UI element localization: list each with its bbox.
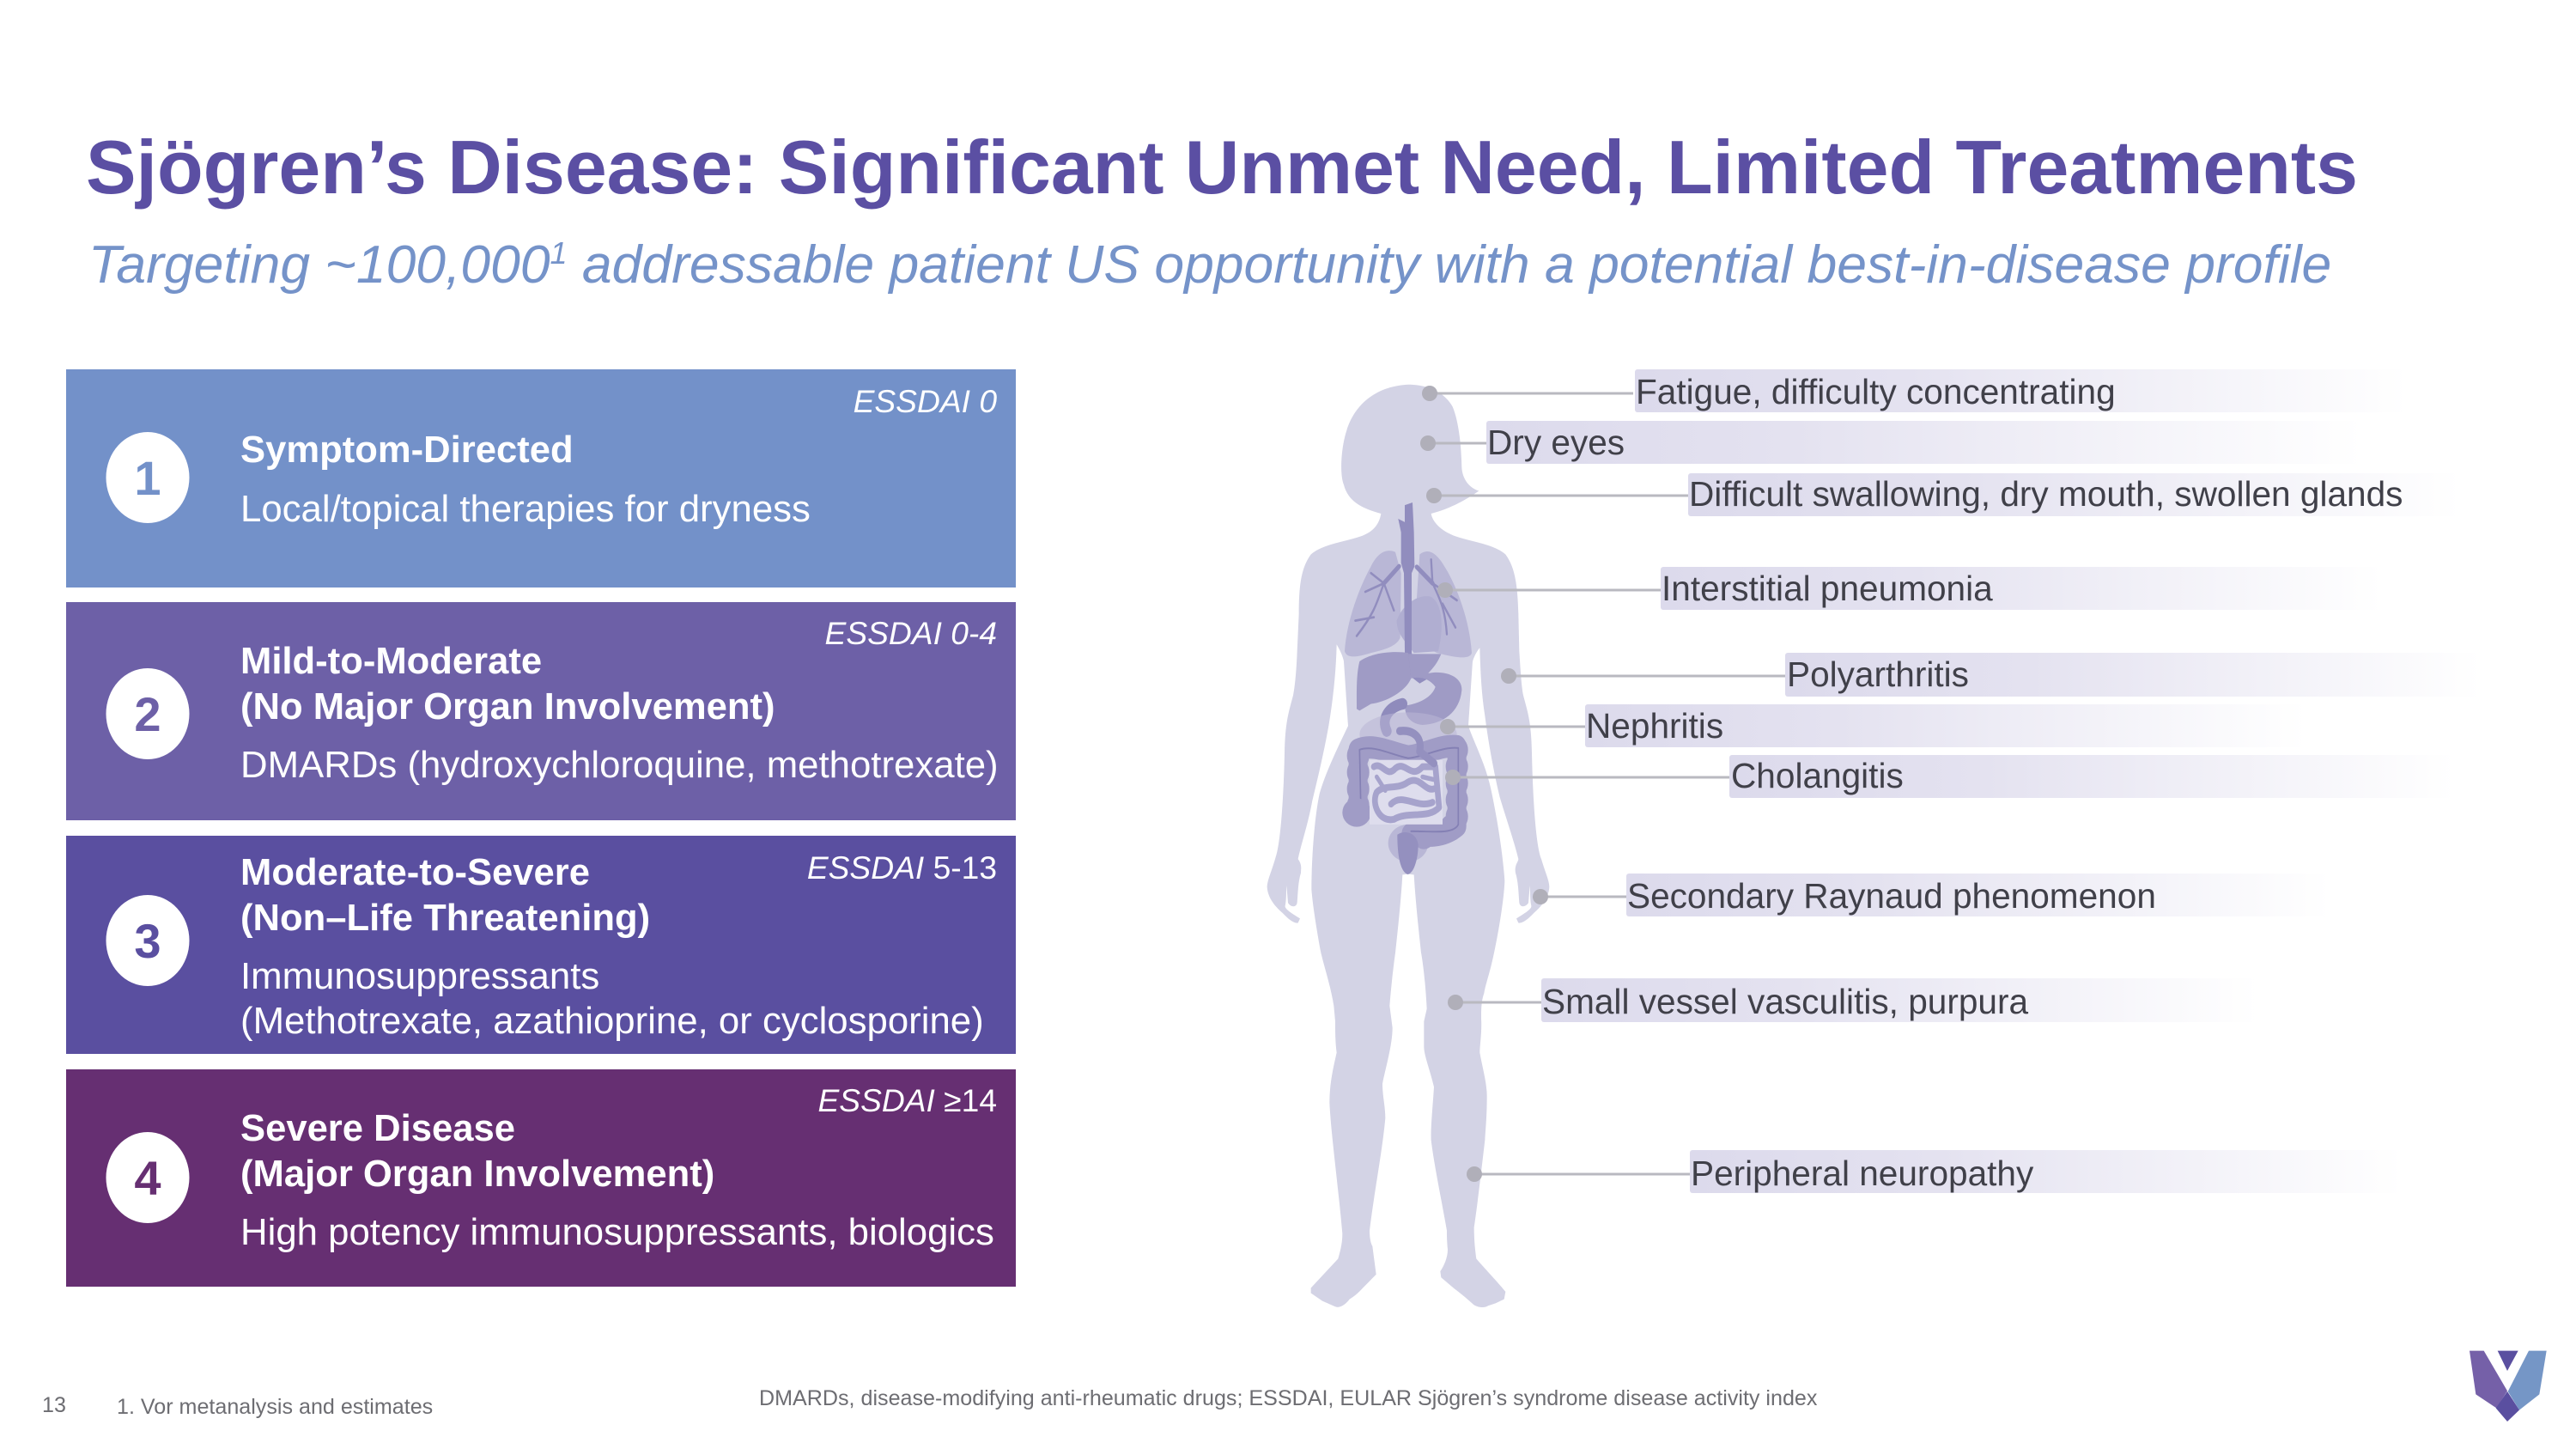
tier 3 heading: Moderate-to-Severe <box>240 852 590 893</box>
duodenum <box>1385 703 1402 731</box>
callout: interstitial pneumonia: Interstitial pneumonia <box>1662 569 1993 608</box>
subtitle: addressable patient US opportunity with a potential best-in-disease profile <box>568 234 2331 295</box>
body silhouette <box>1267 385 1549 1307</box>
callout: polyarthritis: Polyarthritis <box>1787 654 1969 694</box>
subtitle: Targeting ~100,000 <box>88 234 550 295</box>
lungs <box>1345 551 1472 657</box>
tier 2 heading: (No Major Organ Involvement) <box>240 686 775 728</box>
callout: fatigue <box>1422 369 2408 412</box>
callout: dry eyes: Dry eyes <box>1487 423 1625 462</box>
liver <box>1357 652 1411 710</box>
rectum <box>1397 832 1419 874</box>
number badge 2 <box>106 668 189 759</box>
callout: cholangitis: Cholangitis <box>1731 756 1904 795</box>
callout: difficult swallowing: Difficult swallowing, dry mouth, swollen glands <box>1689 474 2403 514</box>
stomach <box>1405 654 1461 725</box>
callout: nephritis <box>1440 704 2306 747</box>
small intestine <box>1370 731 1443 825</box>
callout: cholangitis <box>1445 755 2455 798</box>
number badge 4 <box>106 1132 189 1223</box>
number badge 3: 3 <box>134 914 161 968</box>
callout: polyarthritis <box>1501 653 2481 697</box>
panel: tier 1 symptom-directed <box>66 369 1016 588</box>
heart <box>1397 596 1442 653</box>
subtitle: 1 <box>550 235 568 271</box>
page number: 13 <box>42 1393 66 1417</box>
tier 2 heading: Mild-to-Moderate <box>240 641 542 682</box>
callout: interstitial pneumonia <box>1437 567 2382 610</box>
tier 4 heading: (Major Organ Involvement) <box>240 1154 714 1195</box>
colon <box>1358 746 1458 837</box>
callout: secondary Raynaud phenomenon <box>1533 874 2330 916</box>
tier 4 therapy: High potency immunosuppressants, biologics <box>240 1211 994 1253</box>
footnote: 1. Vor metanalysis and estimates <box>117 1395 433 1419</box>
callout: peripheral neuropathy: Peripheral neuropathy <box>1691 1154 2034 1193</box>
panel: tier 4 severe disease <box>66 1069 1016 1287</box>
ESSDAI 0 label: ESSDAI 0 <box>854 383 997 419</box>
bronchial tree <box>1355 559 1457 636</box>
panel: tier 2 mild-to-moderate <box>66 602 1016 820</box>
tier 1 therapy: Local/topical therapies for dryness <box>240 488 811 530</box>
number badge 4: 4 <box>134 1151 161 1205</box>
callout: peripheral neuropathy <box>1467 1150 2403 1193</box>
tier 1 heading: Symptom-Directed <box>240 429 574 471</box>
callout: small vessel vasculitis: Small vessel vasculitis, purpura <box>1542 982 2028 1021</box>
ESSDAI 0-4 label: ESSDAI 0-4 <box>825 615 997 651</box>
bladder <box>1388 825 1428 861</box>
callout: difficult swallowing <box>1426 473 2461 516</box>
title: Sjögren’s Disease: Significant Unmet Need, Limited Treatments <box>86 125 2358 210</box>
panel: tier 3 moderate-to-severe <box>66 836 1016 1054</box>
ESSDAI 14 label: ESSDAI ≥14 <box>817 1082 997 1118</box>
callout: fatigue: Fatigue, difficulty concentrating <box>1636 372 2116 411</box>
number badge 3 <box>106 895 189 986</box>
body illustration <box>1267 385 1549 1307</box>
tier 3 therapy: Immunosuppressants <box>240 955 599 997</box>
number badge 1 <box>106 432 189 523</box>
number badge 2: 2 <box>134 687 161 741</box>
tier 3 heading: (Non–Life Threatening) <box>240 898 650 939</box>
number badge 1: 1 <box>134 451 161 505</box>
callout: small vessel vasculitis <box>1448 978 2258 1022</box>
tier 4 heading: Severe Disease <box>240 1108 515 1149</box>
tier 3 therapy: (Methotrexate, azathioprine, or cyclosporine) <box>240 1000 984 1042</box>
tier 2 therapy: DMARDs (hydroxychloroquine, methotrexate) <box>240 744 999 786</box>
callout: secondary Raynaud phenomenon: Secondary Raynaud phenomenon <box>1627 876 2156 916</box>
trachea <box>1398 502 1428 684</box>
callout: dry eyes <box>1420 421 2362 464</box>
caecum <box>1342 798 1371 827</box>
callout: nephritis: Nephritis <box>1586 706 1723 746</box>
kidney region <box>1359 712 1457 757</box>
logo <box>2470 1351 2547 1422</box>
ESSDAI 5-13 label: ESSDAI 5-13 <box>807 849 997 886</box>
abbreviations note: DMARDs, disease-modifying anti-rheumatic drugs; ESSDAI, EULAR Sjögren’s syndrome disease activity index <box>759 1386 1818 1410</box>
